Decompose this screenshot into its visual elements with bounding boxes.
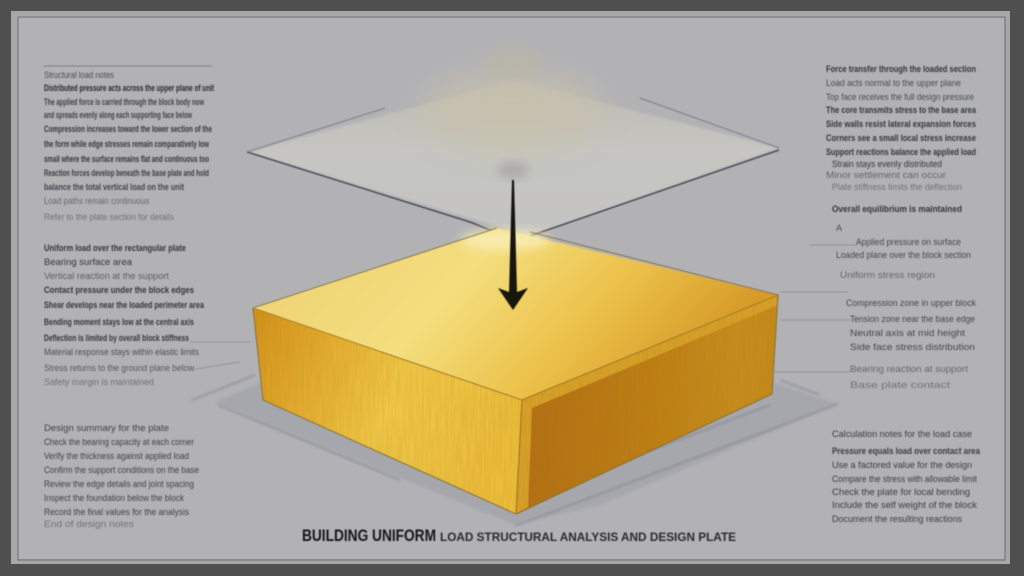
text block: right bottom — [832, 429, 981, 524]
text block: right top — [826, 64, 977, 214]
text block: left top: balance the total vertical load on the unit — [44, 182, 184, 192]
text block: right top: Side walls resist lateral expansion forces — [826, 119, 976, 129]
text block: left bottom: End of design notes — [44, 519, 135, 529]
text block: right top: Support reactions balance the applied load — [826, 147, 976, 157]
text block: right bottom: Use a factored value for the design — [832, 460, 972, 470]
text block: left top — [44, 66, 214, 222]
text block: right bottom: Document the resulting reactions — [832, 514, 962, 524]
text block: right top: Minor settlement can occur — [826, 170, 946, 180]
title — [302, 526, 736, 545]
text block: left top: small where the surface remains flat and continuous too — [44, 154, 209, 164]
icon: ground shadow under block — [192, 375, 838, 526]
text block: left bottom: Confirm the support conditions on the base — [44, 465, 199, 475]
text block: left middle: Uniform load over the rectangular plate — [44, 243, 186, 253]
text block: right top: Load acts normal to the upper plane — [826, 78, 961, 88]
title: BUILDING UNIFORM — [302, 526, 436, 545]
text block: right top: The core transmits stress to the base area — [826, 105, 977, 115]
text block: right bottom: Include the self weight of the block — [832, 500, 978, 510]
text block: right top: Force transfer through the loaded section — [826, 64, 976, 74]
text block: left bottom: Review the edge details and joint spacing — [44, 479, 194, 489]
text block: left top: Distributed pressure acts across the upper plane of unit — [44, 83, 214, 93]
text block: left top: The applied force is carried through the block body now — [44, 97, 205, 107]
text block: right middle: Base plate contact — [850, 380, 951, 390]
text block: left middle: Shear develops near the loaded perimeter area — [44, 300, 205, 310]
block top face — [253, 228, 778, 400]
text block: right middle: Applied pressure on surface — [856, 237, 961, 247]
text block: left bottom: Check the bearing capacity at each corner — [44, 437, 194, 447]
title: LOAD STRUCTURAL ANALYSIS AND DESIGN PLATE — [440, 530, 736, 544]
text block: left bottom: Design summary for the plate — [44, 423, 169, 433]
text block: left top: the form while edge stresses remain comparatively low — [44, 139, 210, 149]
text block: right bottom: Pressure equals load over contact area — [832, 446, 981, 456]
text block: right bottom: Check the plate for local bending — [832, 487, 970, 497]
text block: left middle: Contact pressure under the block edges — [44, 285, 194, 295]
text block: right top: Top face receives the full design pressure — [826, 92, 974, 102]
text block: left middle: Deflection is limited by overall block stiffness — [44, 333, 189, 343]
text block: left top: Compression increases toward the lower section of the — [44, 124, 212, 134]
block right face — [516, 295, 778, 514]
text block: right top: Plate stiffness limits the deflection — [832, 182, 962, 192]
text block: right middle: A — [836, 223, 842, 233]
text block: left middle: Bearing surface area — [44, 257, 132, 267]
text block: left bottom: Record the final values for the analysis — [44, 507, 189, 517]
text block: left top: Structural load notes — [44, 70, 114, 80]
text block: right middle: Loaded plane over the block section — [836, 250, 971, 260]
icon: golden block — [250, 228, 780, 517]
text block: right middle: Compression zone in upper block — [846, 298, 976, 308]
text block: left top: and spreads evenly along each supporting face below — [44, 110, 193, 120]
arrow: downward load — [498, 180, 528, 310]
text block: left middle: Material response stays within elastic limits — [44, 347, 199, 357]
text block: left bottom: Inspect the foundation below the block — [44, 493, 184, 503]
text block: right middle: Side face stress distribution — [850, 342, 975, 352]
text block: right bottom: Calculation notes for the load case — [832, 429, 972, 439]
text block: left middle — [44, 243, 205, 387]
text block: right bottom: Compare the stress with allowable limit — [832, 474, 977, 484]
icon: floating load plane — [247, 46, 779, 236]
text block: right top: Overall equilibrium is maintained — [832, 204, 962, 214]
text block: right middle: Tension zone near the base edge — [850, 314, 975, 324]
block left face — [253, 308, 522, 514]
connector lines — [190, 245, 856, 372]
text block: right middle: Neutral axis at mid height — [850, 328, 966, 338]
text block: left top: Load paths remain continuous — [44, 196, 149, 206]
text block: right middle: Bearing reaction at support — [850, 364, 969, 374]
text block: left top: Refer to the plate section for details — [44, 212, 174, 222]
text block: right top: Strain stays evenly distributed — [832, 159, 942, 169]
text block: right middle: Uniform stress region — [840, 270, 935, 280]
text block: right top: Corners see a small local stress increase — [826, 133, 976, 143]
text block: left middle: Bending moment stays low at the central axis — [44, 317, 194, 327]
text block: right middle — [836, 223, 976, 390]
text block: left top: Reaction forces develop beneath the base plate and hold — [44, 168, 209, 178]
text block: left bottom: Verify the thickness against applied load — [44, 451, 189, 461]
text block: left middle: Vertical reaction at the support — [44, 271, 170, 281]
text block: left middle: Safety margin is maintained — [44, 377, 154, 387]
text block: left bottom — [44, 423, 199, 529]
text block: left middle: Stress returns to the ground plane below — [44, 363, 194, 373]
